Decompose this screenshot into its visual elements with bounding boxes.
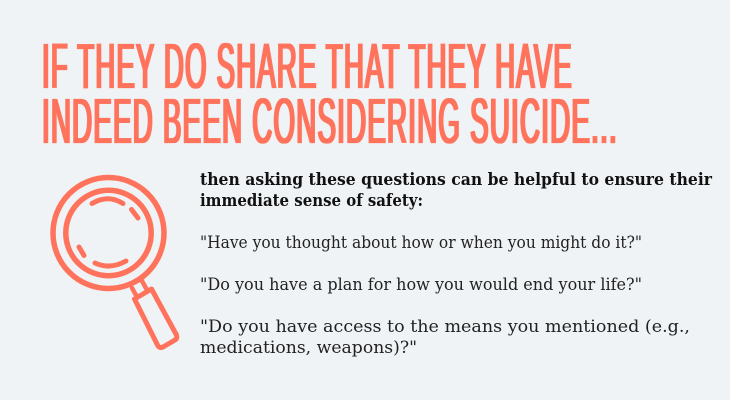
icon: magnifying glass xyxy=(53,178,177,348)
intro text: immediate sense of safety: xyxy=(200,191,423,210)
question 1: "Have you thought about how or when you might do it?" xyxy=(200,233,642,252)
question 3: medications, weapons)?" xyxy=(200,338,417,357)
intro text xyxy=(200,170,712,210)
intro text: then asking these questions can be helpful to ensure their xyxy=(200,170,712,189)
question 3: "Do you have access to the means you mentioned (e.g., xyxy=(200,317,690,336)
question 2: "Do you have a plan for how you would end your life?" xyxy=(200,275,642,294)
title xyxy=(42,30,618,157)
question 3 xyxy=(200,317,690,357)
